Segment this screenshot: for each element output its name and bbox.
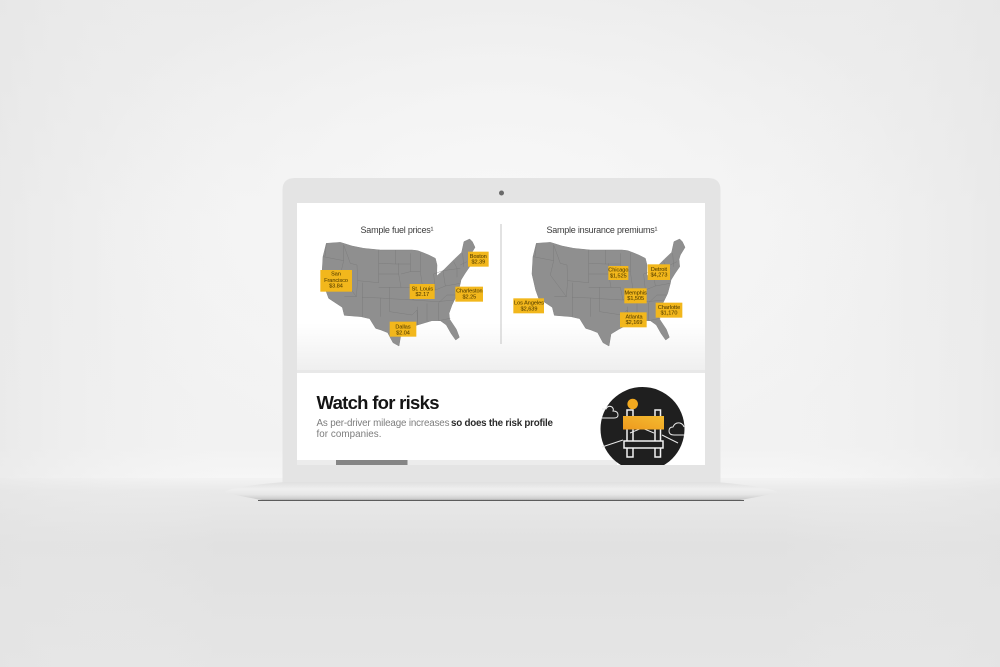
laptop screen [297,203,705,465]
label: Detroit: $4,273 [651,273,667,279]
label: Dallas [390,322,416,337]
label: Boston: Boston [470,254,487,260]
label: Boston [468,252,489,267]
label: Los Angeles: $2,639 [521,306,537,312]
US map shape [532,239,685,346]
screen risks section [297,373,705,465]
label: Charleston: $2.25 [462,294,476,300]
icon: right cloud [669,423,684,435]
screen divider strip [297,370,705,373]
label: Boston: $2.39 [471,260,485,266]
heading: watch for risks: Watch for risks [316,392,440,413]
laptop base shadow line [258,500,744,501]
icon: barrier frame [624,410,663,457]
text: risk profile description: so does the risk profile [451,418,554,429]
label: Memphis: Memphis [625,290,647,296]
label: Chicago: Chicago [608,267,628,273]
laptop [224,178,778,501]
laptop lid [282,178,720,486]
label: Los Angeles [513,298,544,313]
map: insurance premiums [513,239,685,346]
label: San Francisco: San [331,272,341,278]
label: Memphis: $1,505 [627,296,644,302]
label: Los Angeles: Los Angeles [514,301,544,307]
screen bottom strip [297,460,617,465]
label: St. Louis: St. Louis [412,286,433,292]
heading: sample fuel prices: Sample fuel prices¹ [360,225,434,235]
label: San Francisco: $3.84 [329,284,343,290]
background wall [0,0,1000,480]
progress bar [336,460,408,465]
label: San Francisco [320,270,352,292]
label: St. Louis [410,284,435,299]
label: Charleston [455,287,483,302]
center divider [500,224,502,344]
webcam [499,190,504,196]
label: Charlotte: $1,170 [661,311,677,317]
map: fuel prices [320,239,489,346]
label: Charleston: Charleston [456,289,483,295]
label: Dallas: Dallas [395,325,411,331]
icon: road barrier [600,387,684,471]
label: Charlotte: Charlotte [658,305,680,311]
icon: barrier board [623,416,664,430]
label: Atlanta [620,312,647,327]
background glow [80,0,920,500]
label: San Francisco: Francisco [324,278,348,284]
text: risk profile description: for companies. [316,429,382,440]
label: St. Louis: $2.17 [415,292,429,298]
label: Chicago [608,266,628,280]
label: Atlanta: $2,169 [626,320,642,326]
label: Chicago: $1,525 [610,273,627,279]
text: risk profile description [316,418,554,440]
screen maps section [297,203,705,370]
label: Dallas: $2.04 [396,330,410,336]
heading: sample insurance premiums: Sample insurance premiums¹ [546,225,658,235]
icon background circle [600,387,684,471]
label: Charlotte [656,303,682,318]
label: Memphis [624,288,647,303]
label: Detroit [648,264,670,280]
icon: road lines [602,428,678,447]
text: risk profile description: As per-driver mileage increases [316,418,450,429]
icon: left cloud [602,406,618,418]
label: Detroit: Detroit [651,267,668,273]
label: Atlanta: Atlanta [625,314,643,320]
laptop base [224,482,778,500]
background floor [0,478,1000,667]
icon: warning light [627,399,638,409]
US map shape [322,239,475,346]
